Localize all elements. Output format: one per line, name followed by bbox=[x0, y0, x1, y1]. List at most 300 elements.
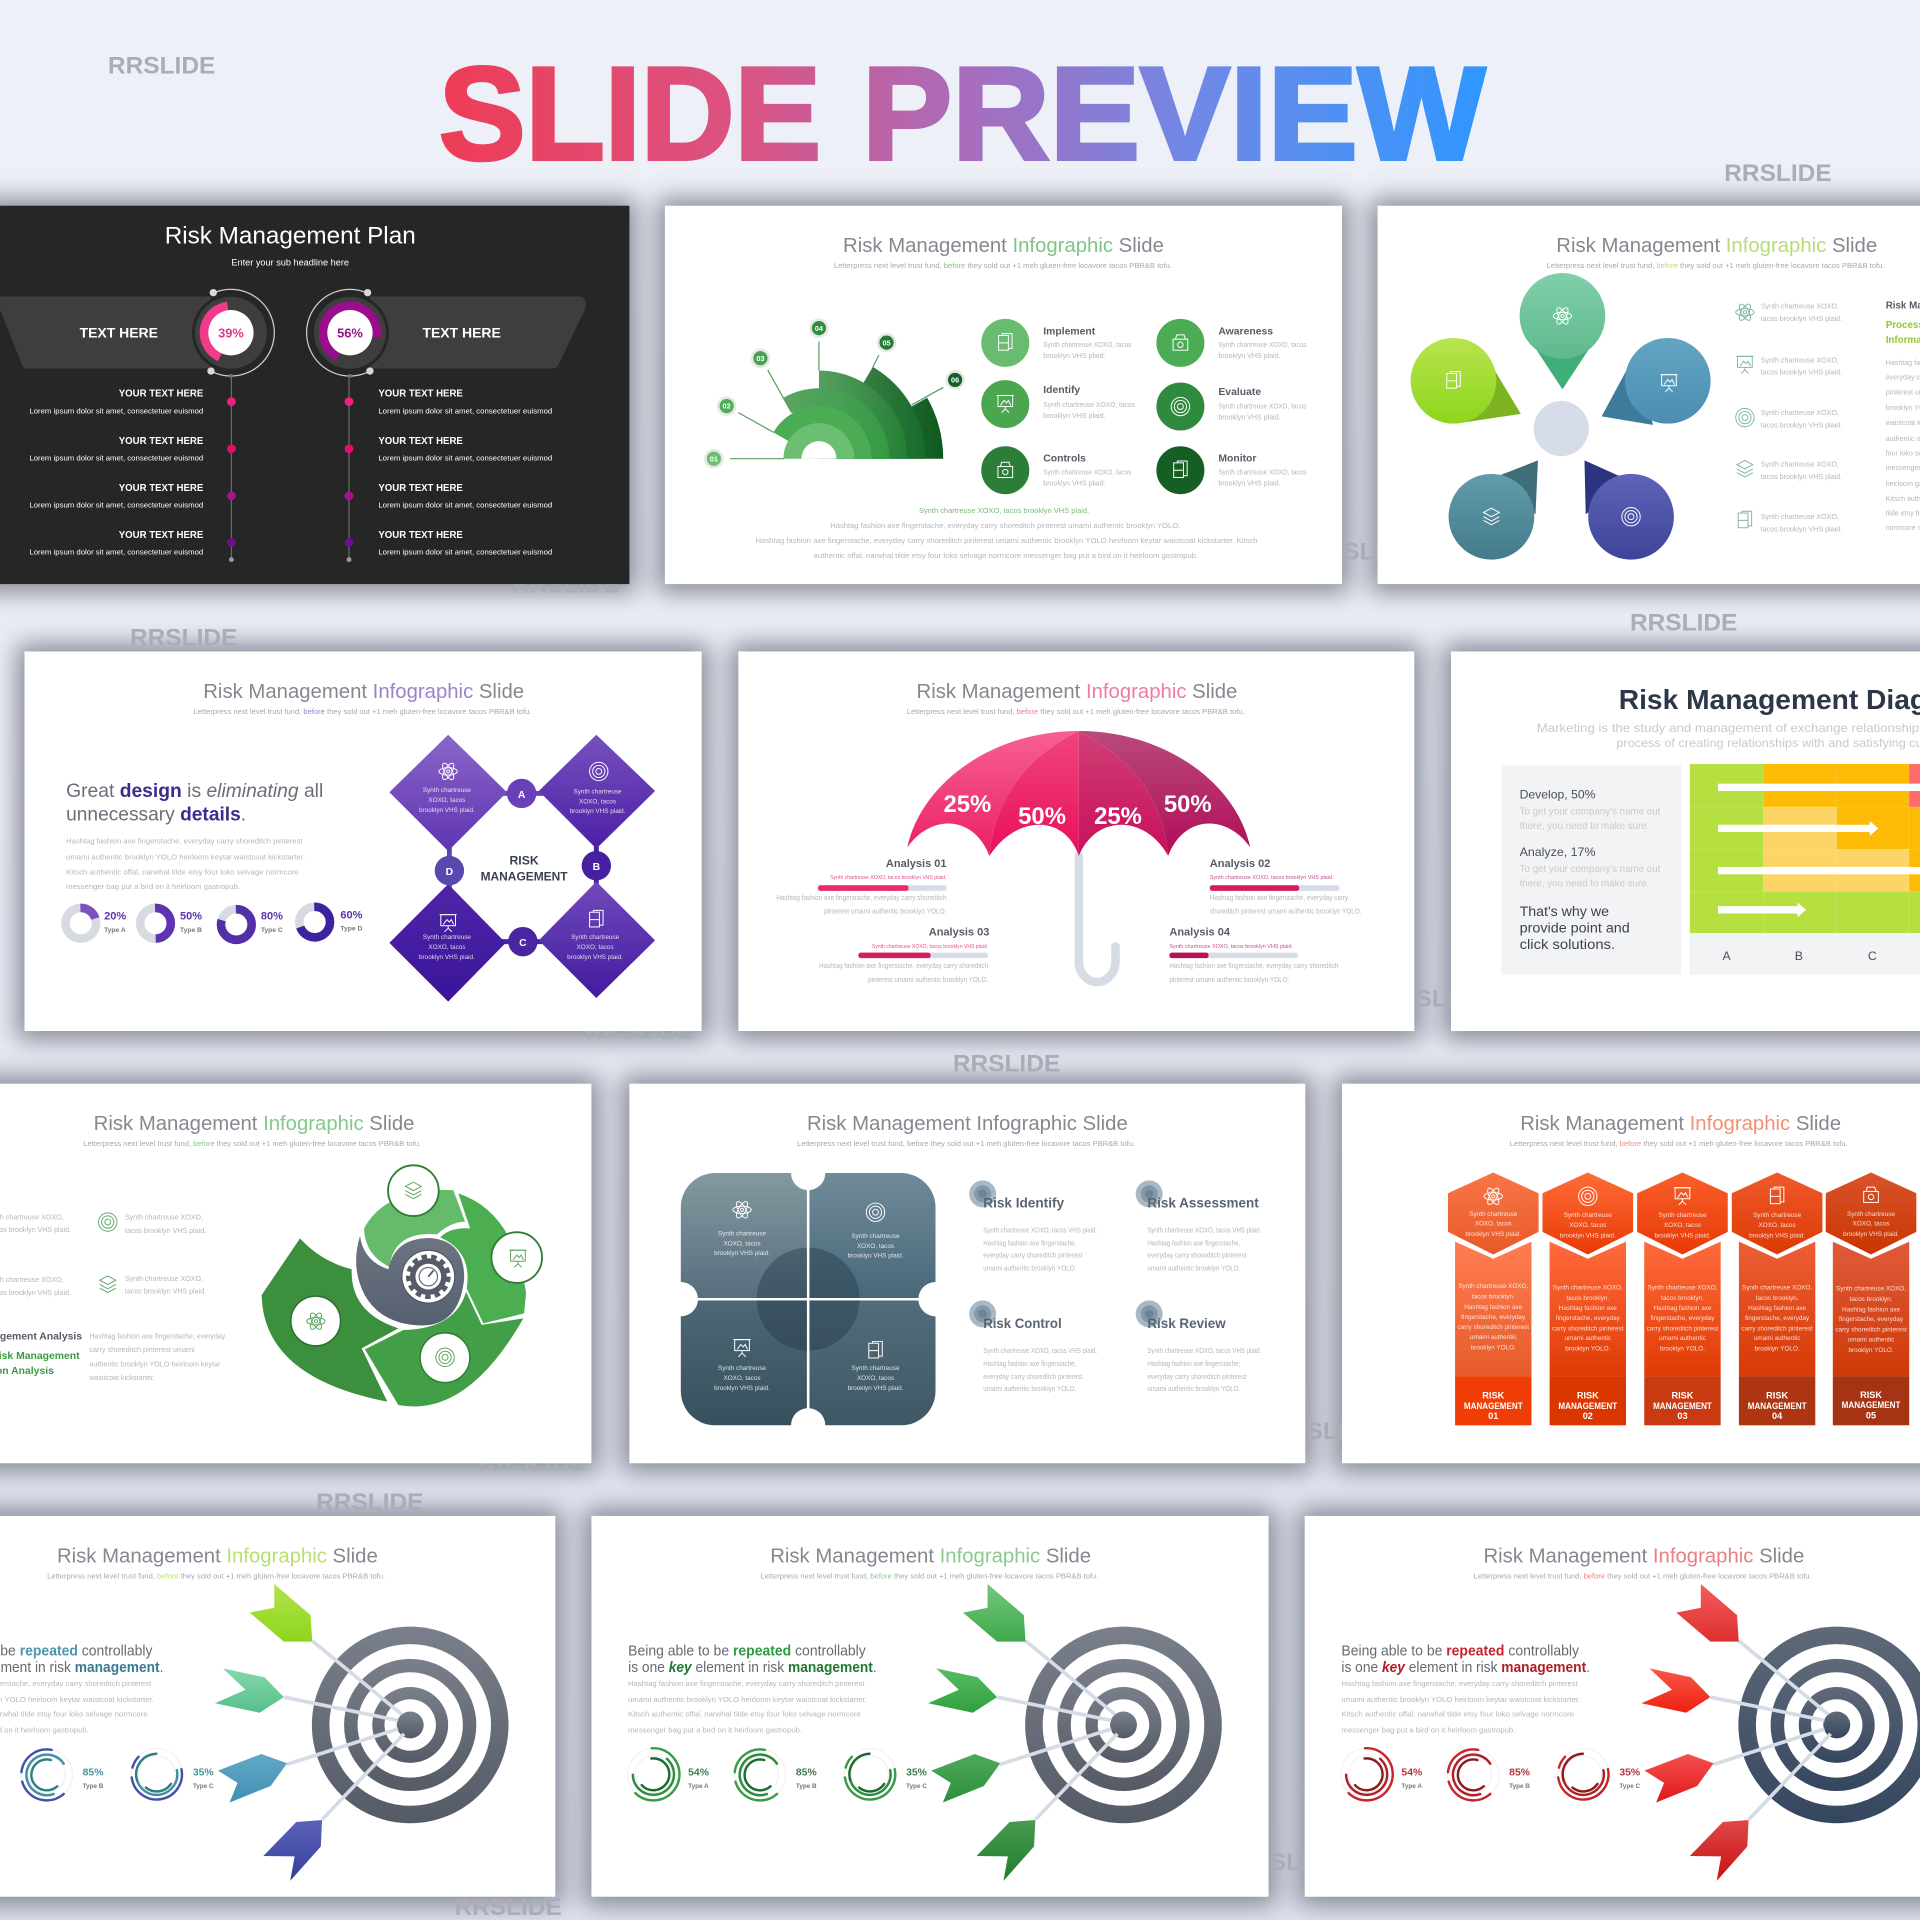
footer text: Hashtag fashion axe fingerstache, everyday carry shoreditch pinterest umami authentic brooklyn YOLO. bbox=[830, 522, 1180, 530]
diamond diagram bbox=[389, 735, 655, 1002]
risk matrix: B bbox=[1795, 949, 1803, 963]
donut labels: 50% bbox=[180, 911, 202, 923]
headline: Being able to be repeated controllably bbox=[1341, 1644, 1580, 1660]
ring charts bbox=[11, 1739, 188, 1811]
right text rows: YOUR TEXT HERE bbox=[378, 436, 463, 447]
risk review bbox=[1136, 1300, 1261, 1393]
headline: Being able to be repeated controllably bbox=[628, 1644, 866, 1660]
analysis 01: pinterest umami authentic brooklyn YOLO. bbox=[824, 907, 947, 915]
diamond diagram: brooklyn VHS plaid. bbox=[570, 808, 626, 815]
six item grid: brooklyn VHS plaid. bbox=[1218, 413, 1281, 421]
right text rows: Lorem ipsum dolor sit amet, consectetuer euismod bbox=[378, 406, 552, 415]
gear hub bbox=[402, 1250, 455, 1303]
fan numbered markers: 05 bbox=[882, 338, 891, 347]
column 01: brooklyn YOLO. bbox=[1471, 1344, 1516, 1351]
slide title: Risk Management Infographic Slide bbox=[1520, 1113, 1841, 1135]
slide title: Risk Management Infographic Slide bbox=[57, 1545, 378, 1567]
column 05: Hashtag fashion axe bbox=[1842, 1306, 1900, 1313]
quadrant puzzle: Synth chartreuse bbox=[718, 1231, 767, 1238]
column 04: Hashtag fashion axe bbox=[1748, 1305, 1807, 1312]
footer text: Synth chartreuse XOXO, tacos brooklyn VHS plaid. bbox=[919, 507, 1089, 515]
body text bbox=[0, 1680, 154, 1735]
risk control: everyday carry shoreditch pinterest bbox=[983, 1373, 1082, 1381]
risk matrix bbox=[1690, 764, 1920, 975]
fan numbered markers: 04 bbox=[815, 324, 824, 333]
column 04: RISK bbox=[1766, 1390, 1788, 1400]
risk assessment: Risk Assessment bbox=[1147, 1195, 1259, 1210]
column 02 bbox=[1542, 1172, 1633, 1425]
umbrella: 25% bbox=[943, 791, 991, 818]
left text columns: carry shoreditch pinterest umami bbox=[89, 1346, 195, 1354]
column 03: tacos brooklyn. bbox=[1661, 1295, 1704, 1302]
fan chart bbox=[704, 318, 965, 468]
list items: Synth chartreuse XOXO, bbox=[1761, 409, 1839, 417]
donut labels bbox=[104, 909, 363, 934]
RRSLIDE watermarks: RRSLIDE bbox=[108, 52, 215, 79]
panel: target slide lime-blue bbox=[0, 1516, 555, 1897]
diamond diagram: brooklyn VHS plaid. bbox=[567, 954, 623, 961]
body text: Hashtag fashion axe fingerstache, everyday carry shoreditch pinterest bbox=[1341, 1680, 1578, 1688]
slide title: Risk Management Infographic Slide bbox=[917, 681, 1237, 703]
analysis 02: shoreditch pinterest umami authentic brooklyn YOLO. bbox=[1210, 907, 1362, 915]
subtitle: Letterpress next level trust fund, before they sold out +1 meh gluten-free locavore tacos PBR&B tofu. bbox=[760, 1571, 1098, 1580]
left text rows: YOUR TEXT HERE bbox=[119, 530, 203, 541]
analysis 04: pinterest umami authentic brooklyn YOLO. bbox=[1169, 976, 1289, 984]
headline bbox=[1341, 1644, 1590, 1676]
list items: tacos brooklyn VHS plaid. bbox=[1761, 421, 1842, 429]
diamond diagram: Synth chartreuse bbox=[423, 934, 471, 941]
petal diagram bbox=[1411, 273, 1711, 560]
list items: tacos brooklyn VHS plaid. bbox=[1761, 315, 1842, 323]
column 02: Synth chartreuse bbox=[1564, 1212, 1612, 1219]
ring labels: 85% bbox=[796, 1768, 817, 1779]
donut labels: Type C bbox=[261, 927, 283, 934]
umbrella: 50% bbox=[1164, 791, 1212, 818]
column 01: tacos brooklyn. bbox=[1472, 1294, 1515, 1301]
column 04: Synth chartreuse bbox=[1753, 1212, 1802, 1219]
column 05: RISK bbox=[1860, 1390, 1882, 1400]
column 05: Synth chartreuse XOXO, bbox=[1836, 1286, 1906, 1293]
six item grid: Identify bbox=[1043, 385, 1080, 396]
six item grid: brooklyn VHS plaid. bbox=[1043, 412, 1106, 420]
fan numbered markers bbox=[704, 318, 965, 468]
panel: target slide green bbox=[591, 1516, 1269, 1897]
ring labels: 54% bbox=[688, 1768, 709, 1779]
risk identify bbox=[969, 1180, 1097, 1272]
body text bbox=[66, 838, 305, 891]
quadrant puzzle: XOXO, tacos bbox=[723, 1240, 761, 1247]
quadrant puzzle: Synth chartreuse bbox=[718, 1365, 767, 1372]
left text panel: there, you need to make sure. bbox=[1520, 821, 1649, 832]
ring labels: Type C bbox=[1619, 1783, 1641, 1790]
left text panel: Analyze, 17% bbox=[1520, 845, 1596, 859]
subtitle: Letterpress next level trust fund, before they sold out +1 meh gluten-free locavore tacos PBR&B tofu. bbox=[1547, 261, 1884, 270]
six item grid: Evaluate bbox=[1218, 387, 1261, 398]
body text: messenger bag put a bird on it heirloom gastropub. bbox=[66, 883, 240, 891]
panel: dark risk management plan slide bbox=[0, 206, 629, 584]
column 03: RISK bbox=[1671, 1390, 1694, 1400]
ring labels: 85% bbox=[1509, 1768, 1530, 1779]
risk identify: Hashtag fashion axe fingerstache, bbox=[983, 1239, 1076, 1247]
diamond diagram: A bbox=[518, 790, 526, 801]
column 01: Synth chartreuse XOXO, bbox=[1458, 1283, 1528, 1290]
body text bbox=[628, 1680, 867, 1735]
analysis 01: Analysis 01 bbox=[886, 858, 947, 870]
left text rows: YOUR TEXT HERE bbox=[119, 389, 203, 400]
left text panel bbox=[1501, 765, 1681, 975]
right text rows: YOUR TEXT HERE bbox=[378, 483, 463, 494]
quadrant puzzle: Synth chartreuse bbox=[851, 1365, 900, 1372]
quadrant puzzle: brooklyn VHS plaid. bbox=[848, 1385, 904, 1392]
band labels: TEXT HERE bbox=[80, 324, 158, 340]
risk control: Risk Control bbox=[983, 1316, 1062, 1331]
column 02: umami authentic bbox=[1564, 1335, 1612, 1342]
list items: Synth chartreuse XOXO, bbox=[1761, 513, 1839, 521]
column 04 bbox=[1732, 1172, 1822, 1425]
donut charts bbox=[66, 907, 330, 940]
ring labels bbox=[83, 1768, 214, 1790]
column 02: 02 bbox=[1583, 1411, 1593, 1421]
main title: SLIDE bbox=[439, 40, 821, 188]
analysis 04: Hashtag fashion axe fingerstache, everyday carry shoreditch bbox=[1169, 962, 1338, 970]
body text: Kitsch authentic offal, narwhal tilde etsy four loko selvage normcore bbox=[66, 868, 299, 876]
umbrella: 50% bbox=[1018, 803, 1066, 830]
column 03: XOXO, tacos bbox=[1664, 1222, 1701, 1229]
column 02: brooklyn VHS plaid. bbox=[1560, 1232, 1616, 1239]
risk identify: everyday carry shoreditch pinterest bbox=[983, 1252, 1082, 1260]
diamond diagram: XOXO, tacos bbox=[577, 944, 614, 951]
column 02: Hashtag fashion axe bbox=[1559, 1305, 1617, 1312]
column 03 bbox=[1637, 1172, 1728, 1425]
intro text bbox=[1537, 721, 1920, 750]
risk review: Synth chartreuse XOXO, tacos VHS plaid. bbox=[1147, 1347, 1261, 1355]
left text rows: YOUR TEXT HERE bbox=[119, 483, 203, 494]
analysis 01: Hashtag fashion axe fingerstache, everyday carry shoreditch bbox=[776, 894, 947, 902]
analysis 03: Synth chartreuse XOXO, tacos brooklyn VHS plaid. bbox=[872, 944, 988, 950]
column 05: brooklyn VHS plaid. bbox=[1843, 1231, 1899, 1238]
diamond diagram: Synth chartreuse bbox=[571, 934, 620, 941]
panel: five petal slide bbox=[1378, 206, 1920, 584]
list items: tacos brooklyn VHS plaid. bbox=[1761, 369, 1842, 377]
right text rows: YOUR TEXT HERE bbox=[378, 389, 463, 400]
left text columns: authentic brooklyn YOLO heirloom keytar bbox=[89, 1361, 221, 1369]
slide title: Risk Management Infographic Slide bbox=[1556, 235, 1877, 257]
diamond diagram: MANAGEMENT bbox=[481, 869, 568, 883]
risk control: umami authentic brooklyn YOLO. bbox=[983, 1385, 1076, 1393]
analysis 03: Analysis 03 bbox=[929, 927, 989, 939]
fan numbered markers: 06 bbox=[951, 376, 959, 385]
column 02: XOXO, tacos bbox=[1569, 1222, 1606, 1229]
column 02: MANAGEMENT bbox=[1558, 1401, 1618, 1411]
column 04: carry shoreditch pinterest bbox=[1741, 1325, 1813, 1332]
target with arrows bbox=[215, 1584, 509, 1881]
column 05: tacos brooklyn. bbox=[1850, 1296, 1893, 1303]
ring labels: 54% bbox=[1401, 1768, 1422, 1779]
ring labels: Type A bbox=[688, 1783, 709, 1790]
column 01: umami authentic bbox=[1470, 1334, 1517, 1341]
body text: Kitsch authentic offal, narwhal tilde etsy four loko selvage normcore bbox=[628, 1711, 861, 1719]
left text rows: Lorem ipsum dolor sit amet, consectetuer euismod bbox=[29, 501, 203, 510]
sub headline: Enter your sub headline here bbox=[231, 258, 349, 268]
timelines bbox=[227, 375, 353, 562]
panel: green fan slide bbox=[665, 206, 1342, 584]
subtitle: Letterpress next level trust fund, before they sold out +1 meh gluten-free locavore tacos PBR&B tofu. bbox=[1474, 1571, 1812, 1580]
footer text: authentic offal, narwhal tilde etsy four loko selvage normcore messenger bag put a bird on it heirloom gastropub. bbox=[814, 552, 1198, 560]
risk identify: Risk Identify bbox=[983, 1195, 1065, 1210]
left text panel: click solutions. bbox=[1520, 937, 1615, 952]
body text: Hashtag fashion axe fingerstache, everyday carry shoreditch pinterest bbox=[66, 838, 302, 846]
risk review: everyday carry shoreditch pinterest bbox=[1147, 1373, 1247, 1381]
quadrant puzzle: XOXO, tacos bbox=[723, 1375, 761, 1382]
column 02: Synth chartreuse XOXO, bbox=[1553, 1284, 1623, 1291]
column 01: MANAGEMENT bbox=[1464, 1401, 1523, 1411]
diamond diagram: brooklyn VHS plaid. bbox=[419, 807, 475, 814]
six item grid: Synth chartreuse XOXO, tacos bbox=[1043, 468, 1132, 476]
analysis 03: pinterest umami authentic brooklyn YOLO. bbox=[868, 976, 988, 984]
ring labels: Type B bbox=[796, 1783, 817, 1790]
band labels: TEXT HERE bbox=[422, 324, 501, 340]
body text: Hashtag fashion axe fingerstache, everyday carry shoreditch pinterest bbox=[628, 1680, 865, 1688]
analysis 02 bbox=[1210, 858, 1362, 915]
donut labels: Type A bbox=[104, 927, 126, 934]
column 03: carry shoreditch pinterest bbox=[1647, 1325, 1718, 1332]
six item grid: Synth chartreuse XOXO, tacos bbox=[1043, 341, 1132, 349]
diamond diagram: XOXO, tacos bbox=[428, 944, 466, 951]
diamond diagram: XOXO, tacos bbox=[428, 797, 466, 804]
slide title: Risk Management Infographic Slide bbox=[843, 235, 1164, 257]
left text panel: To get your company's name out bbox=[1520, 806, 1661, 817]
left text rows: Lorem ipsum dolor sit amet, consectetuer euismod bbox=[29, 453, 203, 462]
six item grid bbox=[981, 318, 1307, 495]
body text: umami authentic brooklyn YOLO heirloom keytar waistcoat kickstarter. bbox=[628, 1696, 867, 1704]
RRSLIDE watermarks: RRSLIDE bbox=[1308, 539, 1415, 566]
target with arrows bbox=[1641, 1584, 1920, 1881]
headline bbox=[0, 1644, 163, 1676]
right text rows: Lorem ipsum dolor sit amet, consectetuer euismod bbox=[378, 453, 552, 462]
subtitle: Letterpress next level trust fund, before they sold out +1 meh gluten-free locavore tacos PBR&B tofu. bbox=[907, 707, 1245, 716]
left text columns: Hashtag fashion axe fingerstache, everyday bbox=[89, 1332, 226, 1340]
slide title: Risk Management Plan bbox=[165, 223, 416, 250]
column 03: Synth chartreuse XOXO, bbox=[1647, 1284, 1718, 1291]
column 01 bbox=[1448, 1172, 1539, 1425]
right text rows bbox=[378, 389, 552, 557]
risk matrix: C bbox=[1868, 949, 1877, 963]
body text bbox=[1341, 1680, 1580, 1735]
subtitle: Letterpress next level trust fund, before they sold out +1 meh gluten-free locavore tacos PBR&B tofu. bbox=[1510, 1139, 1848, 1148]
left text panel: Develop, 50% bbox=[1520, 787, 1596, 801]
subtitle: Letterpress next level trust fund, before they sold out +1 meh gluten-free locavore tacos PBR&B tofu. bbox=[797, 1139, 1135, 1148]
left text columns: waistcoat kickstarter. bbox=[88, 1374, 155, 1382]
slide title: Risk Management Infographic Slide bbox=[807, 1113, 1128, 1135]
column 05: fingerstache, everyday bbox=[1839, 1316, 1904, 1323]
ring labels: 85% bbox=[83, 1768, 103, 1779]
left band bbox=[0, 296, 211, 369]
ring labels bbox=[1401, 1768, 1641, 1790]
risk assessment: Hashtag fashion axe fingerstache, bbox=[1147, 1239, 1240, 1247]
left text panel: provide point and bbox=[1520, 920, 1630, 935]
analysis 02: Hashtag fashion axe fingerstache, everyday carry bbox=[1210, 894, 1349, 902]
list items: Synth chartreuse XOXO, bbox=[1761, 356, 1839, 364]
risk review: Hashtag fashion axe fingerstache, bbox=[1147, 1360, 1240, 1368]
diamond diagram: XOXO, tacos bbox=[579, 798, 616, 805]
donut labels: Type D bbox=[340, 926, 362, 933]
column 03: fingerstache, everyday bbox=[1650, 1315, 1715, 1322]
fan numbered markers: 01 bbox=[710, 454, 718, 463]
headline: Great design is eliminating all bbox=[66, 780, 323, 802]
panel: target slide red bbox=[1305, 1516, 1920, 1897]
target with arrows bbox=[928, 1584, 1222, 1881]
column 04: MANAGEMENT bbox=[1748, 1401, 1807, 1411]
subtitle: Letterpress next level trust fund, before they sold out +1 meh gluten-free locavore tacos PBR&B tofu. bbox=[834, 261, 1172, 270]
column 03: 03 bbox=[1677, 1411, 1688, 1421]
slide title: Risk Management Infographic Slide bbox=[203, 681, 524, 703]
body text: messenger bag put a bird on it heirloom gastropub. bbox=[628, 1727, 802, 1735]
RRSLIDE watermarks: RRSLIDE bbox=[479, 1450, 586, 1477]
column 05: carry shoreditch pinterest bbox=[1835, 1327, 1907, 1334]
panel: umbrella slide bbox=[738, 651, 1414, 1031]
analysis 02: Analysis 02 bbox=[1210, 858, 1270, 870]
ring labels: Type B bbox=[1509, 1783, 1530, 1790]
list items: tacos brooklyn VHS plaid. bbox=[1761, 473, 1842, 481]
analysis 01 bbox=[776, 858, 947, 915]
umbrella bbox=[907, 731, 1250, 982]
column 03: brooklyn VHS plaid. bbox=[1655, 1232, 1711, 1239]
analysis 03: Hashtag fashion axe fingerstache, everyday carry shoreditch bbox=[819, 962, 988, 970]
six item grid: Synth chartreuse XOXO, tacos bbox=[1218, 402, 1307, 410]
quadrant puzzle: brooklyn VHS plaid. bbox=[714, 1385, 770, 1392]
ring labels: Type C bbox=[906, 1783, 927, 1790]
left text panel: To get your company's name out bbox=[1520, 864, 1661, 875]
diamond diagram: brooklyn VHS plaid. bbox=[419, 954, 475, 961]
column 04: tacos brooklyn. bbox=[1756, 1295, 1799, 1302]
right band bbox=[370, 296, 586, 369]
six item grid: Synth chartreuse XOXO, tacos bbox=[1218, 341, 1307, 349]
gauge 56%: 56% bbox=[337, 325, 363, 340]
column 04: 04 bbox=[1772, 1411, 1783, 1421]
six item grid: brooklyn VHS plaid. bbox=[1218, 480, 1281, 488]
list items bbox=[1736, 302, 1842, 533]
ring labels: Type C bbox=[193, 1783, 214, 1790]
left text rows: Lorem ipsum dolor sit amet, consectetuer euismod bbox=[29, 548, 203, 557]
quadrant puzzle: XOXO, tacos bbox=[857, 1243, 894, 1250]
headline bbox=[66, 780, 323, 825]
diamond diagram: B bbox=[593, 862, 601, 873]
left text rows: YOUR TEXT HERE bbox=[119, 436, 203, 447]
ring charts bbox=[1338, 1739, 1615, 1811]
risk review: Risk Review bbox=[1147, 1316, 1226, 1331]
column 04: XOXO, tacos bbox=[1759, 1222, 1796, 1229]
analysis 04 bbox=[1169, 927, 1338, 984]
left text panel: there, you need to make sure. bbox=[1520, 879, 1649, 890]
slide title: Risk Management Infographic Slide bbox=[94, 1113, 414, 1135]
right text rows: Lorem ipsum dolor sit amet, consectetuer euismod bbox=[378, 501, 552, 510]
column 05: umami authentic bbox=[1848, 1336, 1895, 1343]
spiral diagram bbox=[262, 1165, 542, 1406]
diamond diagram: C bbox=[519, 938, 527, 949]
risk identify: Synth chartreuse XOXO, tacos VHS plaid. bbox=[983, 1226, 1097, 1234]
column 04: brooklyn VHS plaid. bbox=[1749, 1232, 1805, 1239]
risk matrix: A bbox=[1722, 949, 1731, 963]
left text panel: That's why we bbox=[1520, 904, 1609, 919]
left text columns: Synth chartreuse XOXO, bbox=[125, 1275, 203, 1283]
headline: unnecessary details. bbox=[66, 803, 246, 825]
analysis 03 bbox=[819, 927, 989, 984]
analysis 04: Analysis 04 bbox=[1169, 927, 1231, 939]
icon discs bbox=[291, 1165, 542, 1383]
column 03: Hashtag fashion axe bbox=[1653, 1305, 1712, 1312]
subtitle: Letterpress next level trust fund, before they sold out +1 meh gluten-free locavore tacos PBR&B tofu. bbox=[193, 707, 531, 716]
column 01: 01 bbox=[1488, 1411, 1498, 1421]
column 03: brooklyn YOLO. bbox=[1660, 1346, 1705, 1353]
subtitle: Letterpress next level trust fund, before they sold out +1 meh gluten-free locavore tacos PBR&B tofu. bbox=[83, 1139, 421, 1148]
slide title: Risk Management Infographic Slide bbox=[770, 1545, 1091, 1567]
fan numbered markers: 02 bbox=[723, 402, 731, 411]
panel: slate quadrant slide bbox=[629, 1084, 1305, 1463]
six item grid: brooklyn VHS plaid. bbox=[1043, 480, 1106, 488]
column 02: RISK bbox=[1577, 1390, 1599, 1400]
column 04: fingerstache, everyday bbox=[1745, 1315, 1810, 1322]
six item grid: brooklyn VHS plaid. bbox=[1043, 352, 1106, 360]
diamond diagram: D bbox=[446, 867, 454, 878]
column 01: Hashtag fashion axe bbox=[1464, 1304, 1523, 1311]
column 01: fingerstache, everyday bbox=[1461, 1314, 1526, 1321]
gauge 56% bbox=[292, 275, 408, 390]
RRSLIDE watermarks: RRSLIDE bbox=[130, 624, 237, 651]
column 05 bbox=[1826, 1172, 1916, 1425]
risk assessment bbox=[1136, 1180, 1261, 1272]
ring labels: 35% bbox=[906, 1768, 927, 1779]
left text columns: tacos brooklyn VHS plaid. bbox=[125, 1288, 206, 1296]
ring labels: 35% bbox=[1619, 1768, 1640, 1779]
six item grid: Monitor bbox=[1218, 454, 1256, 465]
RRSLIDE watermarks: RRSLIDE bbox=[1724, 160, 1832, 187]
diamond diagram: Synth chartreuse bbox=[574, 788, 622, 795]
risk control: Hashtag fashion axe fingerstache, bbox=[983, 1360, 1076, 1368]
column 02: tacos brooklyn. bbox=[1566, 1295, 1609, 1302]
list items: tacos brooklyn VHS plaid. bbox=[1761, 525, 1842, 533]
diamond diagram: RISK bbox=[509, 853, 539, 867]
panel: green spiral slide bbox=[0, 1084, 591, 1463]
quadrant puzzle: brooklyn VHS plaid. bbox=[848, 1253, 904, 1260]
RRSLIDE watermarks: RRSLIDE bbox=[1234, 1849, 1342, 1876]
column 04: brooklyn YOLO. bbox=[1755, 1346, 1800, 1353]
column 04: Synth chartreuse XOXO, bbox=[1742, 1284, 1812, 1291]
column 05: XOXO, tacos bbox=[1852, 1221, 1890, 1228]
analysis 01: Synth chartreuse XOXO, tacos brooklyn VHS plaid. bbox=[830, 875, 947, 881]
band labels bbox=[80, 324, 501, 340]
risk assessment: everyday carry shoreditch pinterest bbox=[1147, 1252, 1247, 1260]
donut labels: 20% bbox=[104, 911, 126, 923]
RRSLIDE watermarks: RRSLIDE bbox=[1271, 1418, 1379, 1445]
RRSLIDE watermarks: RRSLIDE bbox=[953, 1050, 1060, 1077]
RRSLIDE watermarks: RRSLIDE bbox=[512, 572, 619, 599]
matrix arrows bbox=[1718, 784, 1920, 917]
column 05: 05 bbox=[1866, 1411, 1876, 1421]
column 01: brooklyn VHS plaid. bbox=[1465, 1231, 1521, 1238]
analysis 02: Synth chartreuse XOXO, tacos brooklyn VHS plaid. bbox=[1210, 875, 1334, 881]
left text rows: Lorem ipsum dolor sit amet, consectetuer euismod bbox=[29, 406, 203, 415]
RRSLIDE watermarks: RRSLIDE bbox=[316, 1489, 423, 1516]
main title: PREVIEW bbox=[862, 40, 1485, 188]
column 03: Synth chartreuse bbox=[1658, 1212, 1707, 1219]
panel: risk management diagram slide bbox=[1451, 651, 1920, 1031]
column 03: umami authentic bbox=[1659, 1335, 1707, 1342]
column 01: XOXO, tacos bbox=[1475, 1221, 1512, 1228]
donut labels: 60% bbox=[340, 909, 363, 921]
six item grid: Awareness bbox=[1218, 326, 1273, 337]
list items: Synth chartreuse XOXO, bbox=[1761, 303, 1839, 311]
umbrella: 25% bbox=[1094, 803, 1142, 830]
